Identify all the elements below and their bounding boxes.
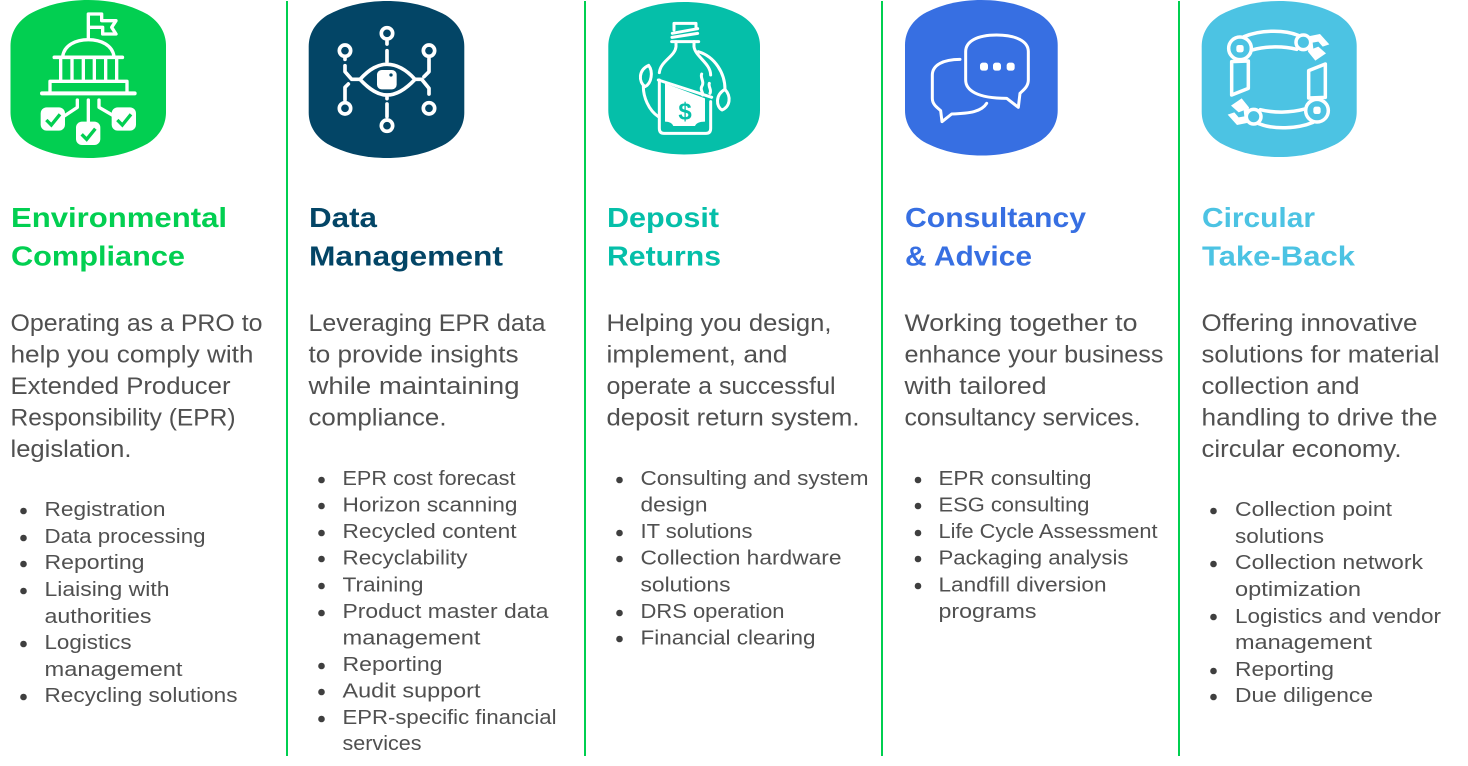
bullet list: Horizon scanning <box>342 494 518 516</box>
bullet list: Audit support <box>342 680 481 702</box>
text block: description <box>606 310 860 432</box>
bullet list <box>20 499 238 707</box>
text block: description: Working together to <box>904 310 1138 337</box>
heading: Deposit Returns <box>607 202 721 272</box>
panel: Deposit Returns <box>606 2 868 650</box>
text block: description: Operating as a PRO to <box>10 310 262 337</box>
text block: description: Responsibility (EPR) <box>10 404 236 432</box>
text block: description: Extended Producer <box>10 373 231 400</box>
heading: Circular Take-Back <box>1202 202 1355 272</box>
bullet list: Reporting <box>1235 659 1334 681</box>
bullet list: solutions <box>640 574 730 596</box>
bullet list: ESG consulting <box>938 494 1090 516</box>
bullet list: Consulting and system <box>640 468 868 490</box>
bullet list <box>915 468 1158 623</box>
bullet list: design <box>640 494 708 516</box>
text block: description: Leveraging EPR data <box>308 310 546 337</box>
bullet list: DRS operation <box>640 601 784 623</box>
text block: description <box>307 310 546 432</box>
bullet list: Liaising with <box>44 579 170 601</box>
heading: Environmental Compliance: Compliance <box>11 240 185 272</box>
bullet list <box>318 468 556 755</box>
panel: Environmental Compliance <box>10 0 262 707</box>
text block: description <box>1202 310 1440 463</box>
bullet list: authorities <box>44 606 152 628</box>
bullet list: Recyclability <box>342 548 468 570</box>
bullet list: programs <box>938 601 1036 623</box>
bullet list: Collection network <box>1235 552 1424 574</box>
bullet list: Financial clearing <box>640 628 816 650</box>
bullet list: solutions <box>1235 526 1324 548</box>
bullet list: Collection point <box>1235 499 1393 521</box>
heading: Consultancy & Advice: & Advice <box>905 240 1032 272</box>
bullet list: Life Cycle Assessment <box>938 521 1158 543</box>
icon: bottle with money label: $ <box>678 98 692 125</box>
bullet list: management <box>1235 632 1373 654</box>
bullet list: Recycling solutions <box>44 685 238 707</box>
heading: Data Management: Management <box>309 240 503 272</box>
text block: description: Offering innovative <box>1202 310 1418 337</box>
bullet list: Data processing <box>44 526 206 548</box>
bullet list: Due diligence <box>1235 685 1373 707</box>
heading: Environmental Compliance: Environmental <box>11 202 227 233</box>
text block: description: handling to drive the <box>1202 404 1438 432</box>
bullet list: Collection hardware <box>640 548 842 570</box>
bullet list: management <box>342 628 481 650</box>
text block: description <box>10 310 262 463</box>
icon: eye with data nodes <box>309 1 464 158</box>
text block: description: solutions for material <box>1202 342 1440 368</box>
heading: Consultancy & Advice <box>905 202 1086 272</box>
text block: description: to provide insights <box>308 342 518 368</box>
bullet list: Landfill diversion <box>938 574 1106 596</box>
text block: description: consultancy services. <box>904 404 1140 432</box>
text block: description: operate a successful <box>606 373 836 400</box>
text block: description: while maintaining <box>307 373 520 400</box>
bullet list: Reporting <box>44 552 144 574</box>
heading: Data Management <box>309 202 503 272</box>
text block: description: enhance your business <box>904 342 1164 368</box>
icon: robotic arms in a loop <box>1202 1 1357 157</box>
bullet list: Reporting <box>342 654 442 676</box>
icon: bottle with money label <box>608 2 760 154</box>
text block: description: implement, and <box>606 342 788 368</box>
bullet list: services <box>342 733 422 755</box>
bullet list: optimization <box>1235 579 1361 601</box>
text block: description: circular economy. <box>1202 436 1402 463</box>
panel: Data Management <box>307 1 556 755</box>
heading: Deposit Returns: Deposit <box>607 202 719 233</box>
bullet list <box>616 468 868 650</box>
icon: government building with checks <box>10 0 166 158</box>
text block: description: help you comply with <box>10 342 254 368</box>
bullet list: Logistics and vendor <box>1235 606 1441 628</box>
text block: description: compliance. <box>308 404 446 432</box>
bullet list: IT solutions <box>640 521 752 543</box>
bullet list: Registration <box>44 499 166 521</box>
bullet list: EPR-specific financial <box>342 707 556 729</box>
heading: Circular Take-Back: Take-Back <box>1202 240 1355 272</box>
bullet list <box>1210 499 1441 707</box>
bullet list: Logistics <box>44 632 132 654</box>
text block: description <box>903 310 1164 432</box>
heading: Environmental Compliance <box>11 202 227 272</box>
text block: description: Helping you design, <box>606 310 832 337</box>
heading: Deposit Returns: Returns <box>607 240 721 272</box>
bullet list: management <box>44 659 183 681</box>
bullet list: Packaging analysis <box>938 548 1128 570</box>
panel: Consultancy & Advice <box>903 0 1164 623</box>
heading: Consultancy & Advice: Consultancy <box>905 202 1086 233</box>
text block: description: legislation. <box>10 436 132 463</box>
bullet list: EPR consulting <box>938 468 1092 490</box>
bullet list: Recycled content <box>342 521 517 543</box>
panel: Circular Take-Back <box>1202 1 1441 707</box>
icon: speech bubbles <box>905 0 1058 156</box>
bullet list: Training <box>342 574 424 596</box>
heading: Data Management: Data <box>309 202 377 233</box>
text block: description: with tailored <box>903 373 1046 400</box>
bullet list: EPR cost forecast <box>342 468 516 490</box>
text block: description: deposit return system. <box>606 404 860 432</box>
text block: description: collection and <box>1202 373 1360 400</box>
bullet list: Product master data <box>342 601 549 623</box>
heading: Circular Take-Back: Circular <box>1202 202 1315 233</box>
